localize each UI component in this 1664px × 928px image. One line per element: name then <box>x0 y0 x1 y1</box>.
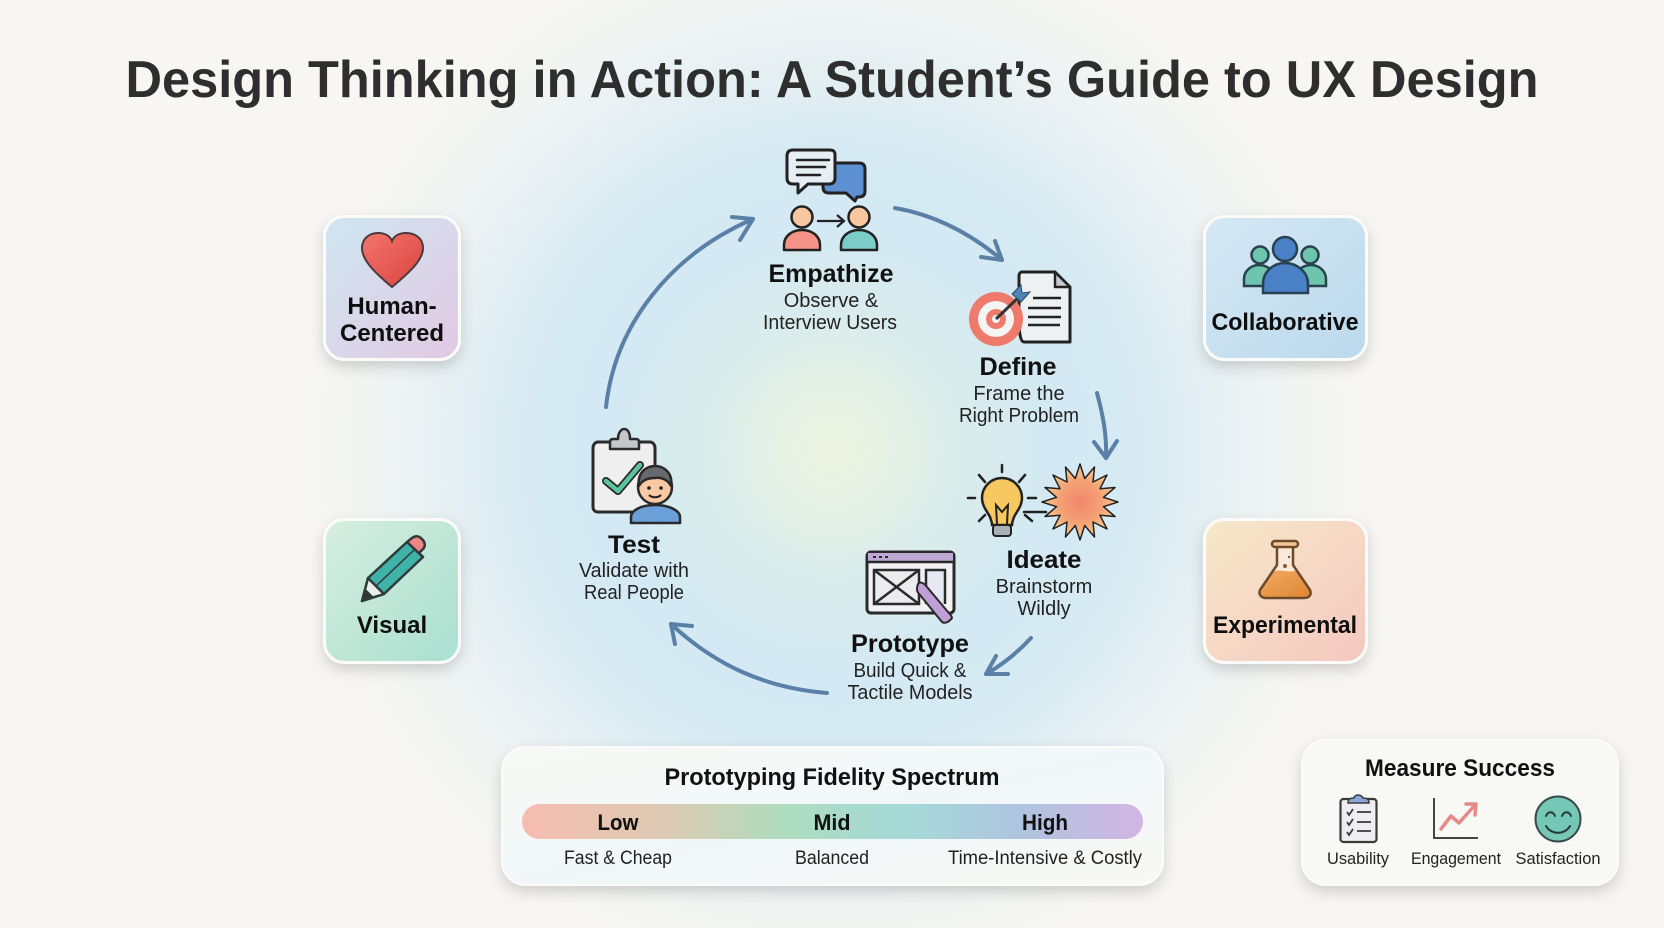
panel: Prototyping Fidelity Spectrum: Balanced <box>795 848 869 869</box>
step: Test: Validate with <box>579 560 689 582</box>
icon: light bulb and burst <box>968 464 1118 540</box>
panel: Prototyping Fidelity Spectrum: Low <box>598 810 639 835</box>
arrow: Prototype to Test <box>671 624 827 693</box>
icon: engagement chart <box>1434 798 1478 838</box>
step: Prototype: Tactile Models <box>848 682 972 704</box>
arrow: Test to Empathize <box>606 217 753 407</box>
panel: Measure Success: Satisfaction <box>1516 849 1600 868</box>
card: Human-Centered: Centered <box>340 320 444 347</box>
icon: wireframe window and stylus <box>867 552 954 623</box>
panel: Prototyping Fidelity Spectrum: High <box>1022 810 1068 835</box>
step: Ideate: Ideate <box>1006 546 1082 574</box>
card: Collaborative <box>1204 216 1366 360</box>
icon: team <box>1244 237 1326 293</box>
step: Prototype: Prototype <box>851 630 969 658</box>
step: Test: Test <box>608 531 661 559</box>
arrow: Empathize to Define <box>895 208 1002 260</box>
step: Ideate: Brainstorm <box>996 576 1092 598</box>
card: Experimental: Experimental <box>1213 612 1357 639</box>
step: Prototype: Build Quick & <box>854 660 967 682</box>
panel: Measure Success: Measure Success <box>1365 755 1555 782</box>
step: Define: Define <box>980 353 1057 381</box>
panel: Prototyping Fidelity Spectrum: Prototyping Fidelity Spectrum <box>664 764 1000 791</box>
step: Define: Frame the <box>973 383 1065 405</box>
icon: target and document <box>969 272 1070 346</box>
step: Ideate: Wildly <box>1017 598 1071 620</box>
step: Test <box>579 429 689 604</box>
spectrum bar <box>522 804 1143 839</box>
step: Empathize: Empathize <box>768 260 894 288</box>
icon: conversation <box>784 150 877 250</box>
panel: Measure Success: Engagement <box>1411 849 1501 868</box>
card: Collaborative: Collaborative <box>1212 309 1358 336</box>
icon: satisfaction smiley <box>1536 796 1580 842</box>
panel: Prototyping Fidelity Spectrum: Fast & Cheap <box>564 848 672 869</box>
panel: Measure Success <box>1302 740 1618 885</box>
step: Prototype <box>848 552 972 704</box>
icon: clipboard and person <box>593 429 680 523</box>
icon: usability checklist <box>1340 795 1376 842</box>
panel: Prototyping Fidelity Spectrum: Mid <box>814 810 850 835</box>
card: Visual <box>324 520 460 662</box>
card: Human-Centered <box>324 216 460 360</box>
card: Human-Centered: Human- <box>347 293 437 320</box>
panel: Prototyping Fidelity Spectrum <box>502 747 1163 885</box>
arrow: Ideate to Prototype <box>986 638 1031 674</box>
step: Define <box>959 272 1079 427</box>
step: Empathize: Observe & <box>784 290 879 312</box>
icon: pencil <box>362 536 425 601</box>
step: Define: Right Problem <box>959 405 1079 427</box>
card: Experimental <box>1204 520 1366 662</box>
icon: flask <box>1259 541 1311 598</box>
step: Empathize <box>763 150 897 334</box>
card: Visual: Visual <box>357 612 427 639</box>
icon: heart <box>362 233 423 287</box>
panel: Prototyping Fidelity Spectrum: Time-Intensive & Costly <box>948 848 1142 869</box>
step: Ideate <box>968 464 1118 620</box>
step: Test: Real People <box>584 582 684 604</box>
arrow: Define to Ideate <box>1094 393 1117 458</box>
title: Design Thinking in Action: A Student’s Guide to UX Design <box>126 51 1538 109</box>
step: Empathize: Interview Users <box>763 312 897 334</box>
panel: Measure Success: Usability <box>1327 849 1389 868</box>
